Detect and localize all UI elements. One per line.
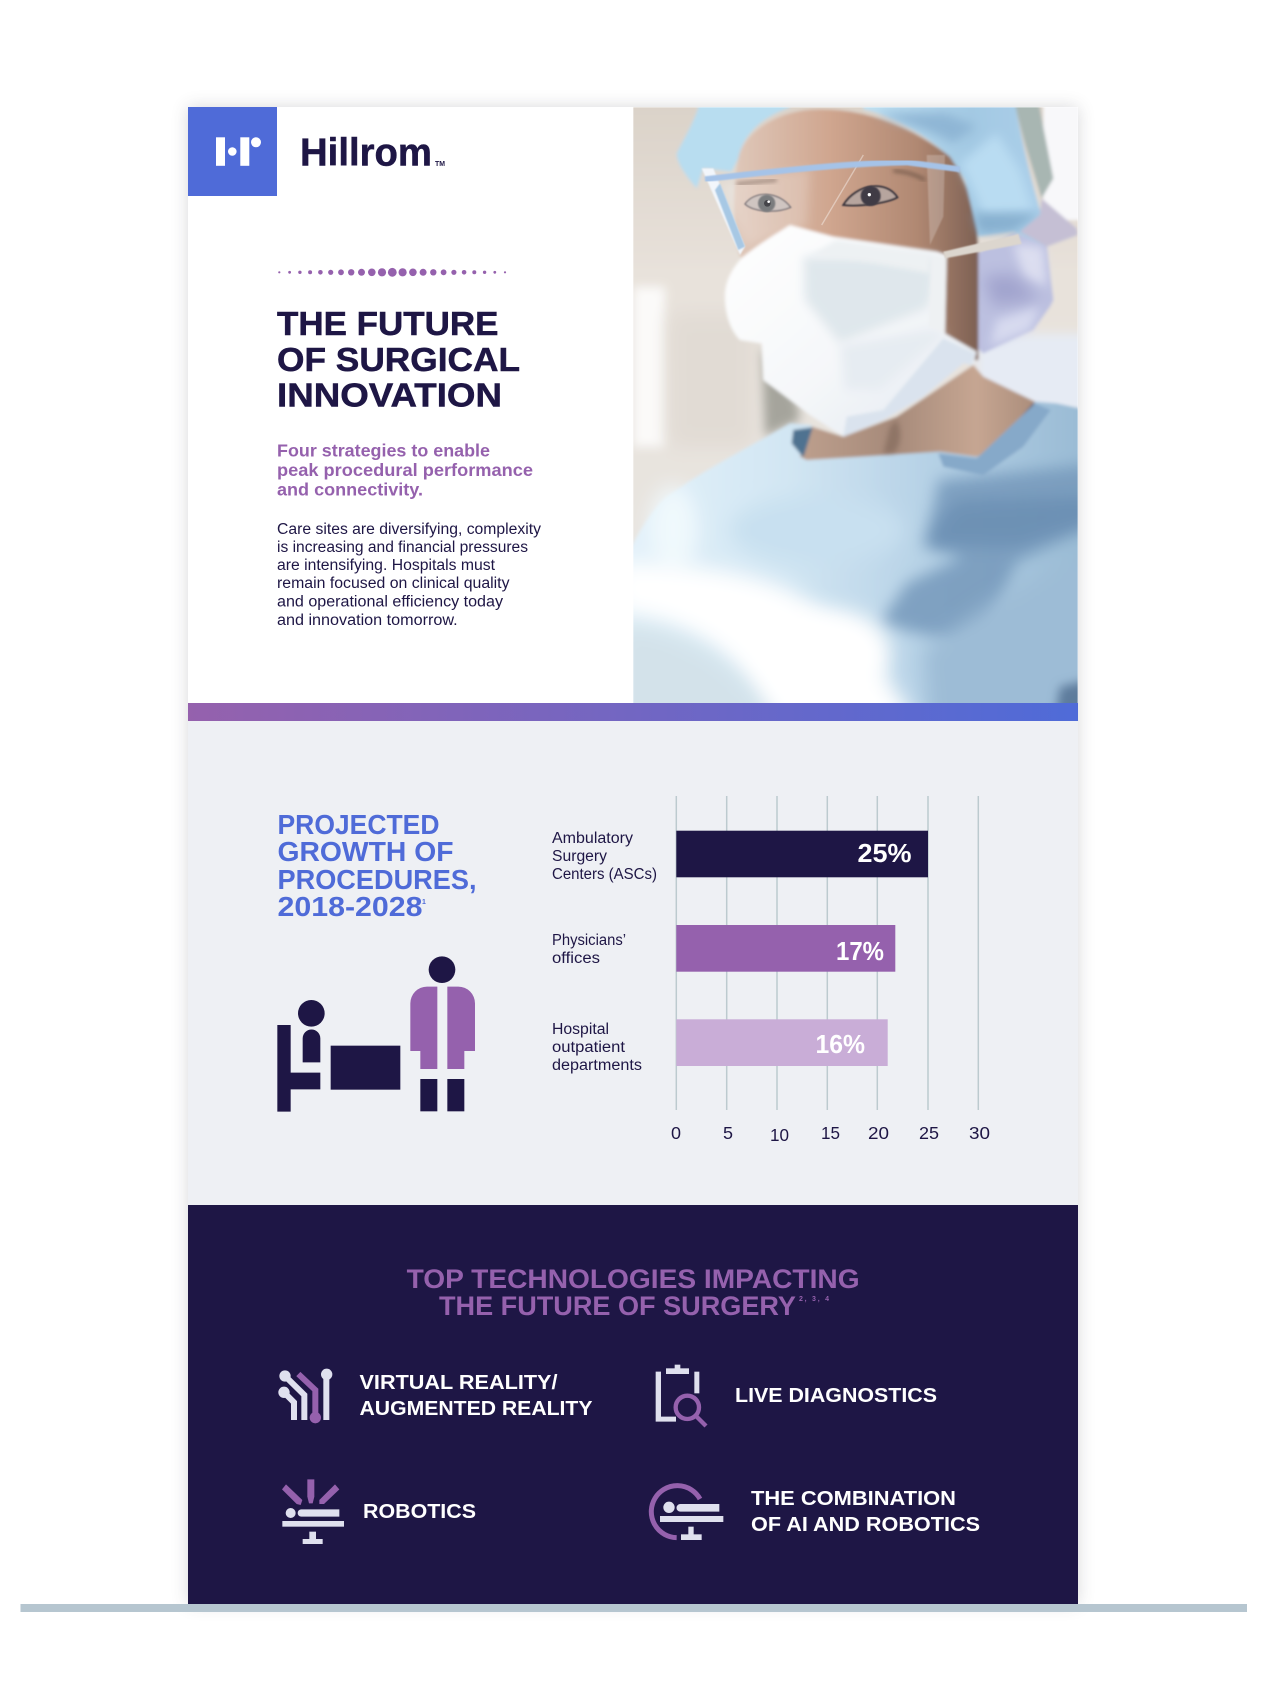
label: AI and robotics: OF AI AND ROBOTICS	[751, 1514, 980, 1536]
panel: hero	[188, 107, 1078, 703]
category labels: Centers (ASCs)	[552, 866, 657, 883]
heading: top technologies: 2, 3, 4	[799, 1296, 829, 1303]
title: INNOVATION	[277, 376, 502, 414]
label: robotics: ROBOTICS	[363, 1501, 476, 1523]
category labels: Ambulatory	[552, 830, 633, 847]
eyes	[737, 171, 925, 212]
mask tie	[943, 234, 1022, 258]
category labels	[552, 830, 657, 1074]
technology: AI and robotics	[651, 1486, 980, 1540]
card shadow	[188, 107, 1078, 1604]
label: AI and robotics	[751, 1488, 980, 1536]
intro paragraph: and operational efficiency today	[277, 594, 503, 610]
heading: projected growth: GROWTH OF	[278, 836, 454, 867]
logo wordmark: Hillrom	[300, 132, 432, 175]
heading: projected growth: 2018-2028	[278, 891, 422, 922]
heading: top technologies: TOP TECHNOLOGIES IMPACTING	[407, 1264, 860, 1294]
label: VR/AR	[360, 1372, 593, 1420]
axis labels: 5	[723, 1123, 733, 1143]
icon: scanner and table	[651, 1486, 723, 1540]
bar: ASCs 25%: 25%	[858, 838, 912, 868]
shield wash	[730, 172, 810, 244]
face	[734, 109, 978, 360]
bar chart	[552, 796, 990, 1145]
axis labels: 15	[821, 1123, 840, 1143]
heading: projected growth: PROJECTED	[278, 809, 440, 840]
title	[277, 305, 520, 414]
gown	[633, 400, 1078, 703]
intro paragraph: is increasing and financial pressures	[277, 539, 528, 556]
subtitle: peak procedural performance	[277, 460, 533, 480]
technology: VR/AR	[278, 1369, 593, 1423]
baseline strip	[20, 1604, 1247, 1612]
heading: top technologies	[407, 1264, 860, 1321]
dotted decoration	[278, 268, 506, 277]
intro paragraph: are intensifying. Hospitals must	[277, 557, 496, 574]
photo background glow	[633, 87, 1110, 447]
subtitle: and connectivity.	[277, 480, 423, 500]
bar: physicians' offices 17%	[676, 925, 895, 972]
intro paragraph	[277, 521, 541, 629]
technology: robotics	[282, 1479, 476, 1544]
panel: projected growth	[188, 721, 1078, 1205]
neck	[792, 365, 1051, 475]
logo square	[188, 107, 277, 196]
icon: circuit lines	[278, 1369, 332, 1423]
category labels: Physicians’	[552, 932, 626, 949]
chart gridlines	[676, 796, 978, 1110]
heading: projected growth	[278, 809, 476, 922]
bar: ASCs 25%	[676, 831, 928, 877]
subtitle	[277, 440, 533, 500]
panel: top technologies	[188, 1205, 1078, 1604]
heading: projected growth: PROCEDURES,	[278, 864, 476, 895]
bar: hospital outpatient 16%	[676, 1019, 888, 1066]
category labels: departments	[552, 1057, 642, 1074]
title: THE FUTURE	[277, 305, 498, 342]
category labels: Surgery	[552, 848, 607, 865]
face shield	[702, 155, 960, 255]
photo: soft painted layers	[633, 107, 1078, 703]
photo: masked surgeon	[633, 107, 1078, 703]
axis labels	[671, 1123, 990, 1145]
heading: projected growth: 1	[422, 899, 426, 906]
axis labels: 20	[868, 1123, 889, 1143]
icon: robotic arms over table	[282, 1479, 344, 1544]
gradient divider bar	[188, 703, 1078, 721]
surgical cap back	[968, 93, 1053, 353]
label: VR/AR: VIRTUAL REALITY/	[360, 1372, 558, 1394]
category labels: outpatient	[552, 1039, 626, 1056]
axis labels: 0	[671, 1123, 681, 1143]
title: OF SURGICAL	[277, 341, 520, 378]
axis labels: 25	[919, 1123, 939, 1143]
bar: hospital outpatient 16%: 16%	[816, 1029, 865, 1059]
category labels: Hospital	[552, 1021, 609, 1038]
bar: physicians' offices 17%: 17%	[836, 936, 884, 966]
label: VR/AR: AUGMENTED REALITY	[360, 1398, 593, 1420]
label: AI and robotics: THE COMBINATION	[751, 1488, 956, 1510]
intro paragraph: remain focused on clinical quality	[277, 575, 510, 592]
axis labels: 30	[969, 1123, 990, 1143]
intro paragraph: Care sites are diversifying, complexity	[277, 521, 541, 538]
surgical cap front	[677, 93, 1078, 247]
label: live diagnostics: LIVE DIAGNOSTICS	[735, 1385, 937, 1407]
intro paragraph: and innovation tomorrow.	[277, 612, 458, 629]
logo wordmark: TM	[435, 159, 445, 168]
category labels: offices	[552, 950, 600, 967]
heading: top technologies: THE FUTURE OF SURGERY	[439, 1291, 796, 1321]
mask	[725, 225, 977, 437]
axis labels: 10	[770, 1125, 789, 1145]
icon: doctor and patient	[277, 956, 475, 1112]
technology: live diagnostics	[656, 1365, 937, 1426]
icon: clipboard and magnifier	[656, 1365, 706, 1426]
subtitle: Four strategies to enable	[277, 440, 490, 460]
